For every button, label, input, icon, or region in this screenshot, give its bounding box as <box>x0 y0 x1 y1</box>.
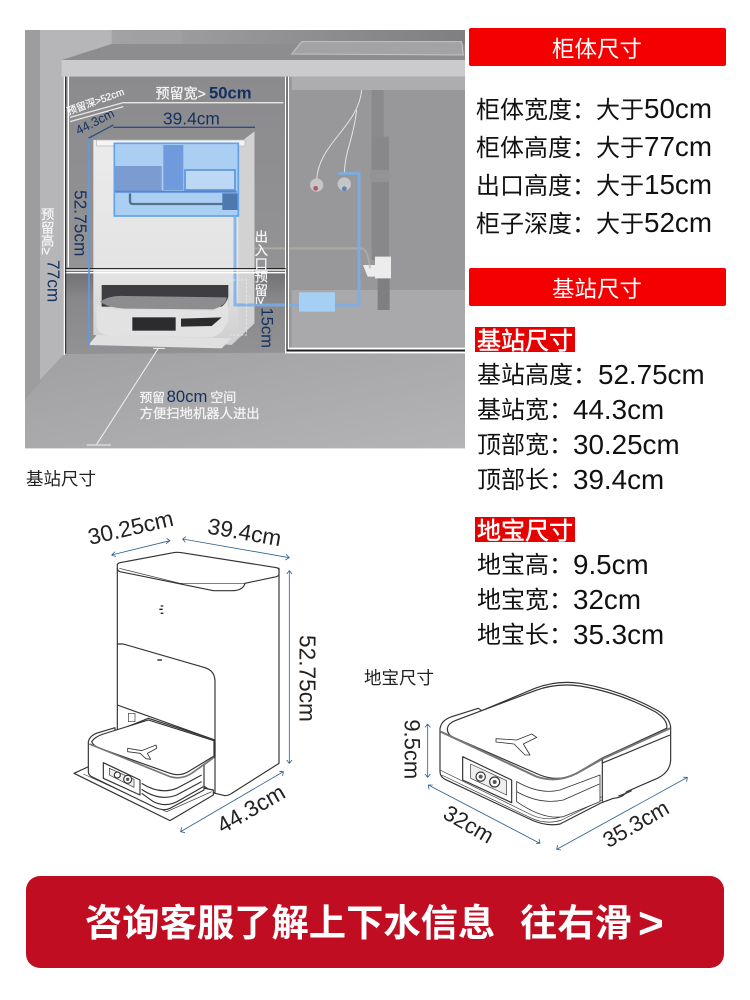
text block: cabinet size list: 柜子深度： <box>476 211 596 238</box>
back wall above counter <box>219 30 465 44</box>
dimension labels <box>85 505 320 838</box>
text block: base station dimensions: 顶部长： <box>477 467 573 494</box>
panel: under-sink cabinet installation photo <box>25 30 465 448</box>
text block: mop robot dimensions: 地宝长： <box>477 622 573 649</box>
lid <box>117 552 279 591</box>
robot control panel <box>103 763 140 795</box>
robot Y logo <box>128 745 157 759</box>
floor <box>25 353 465 448</box>
panel: under-sink cabinet installation photo: 50cm <box>209 83 252 102</box>
call to action banner: 往右滑 <box>520 902 632 944</box>
tubing behind <box>238 248 370 268</box>
call to action banner: 咨询客服了解上下水信息 <box>85 902 495 944</box>
dimension labels: 预留 <box>140 391 165 405</box>
dimension labels <box>399 719 673 853</box>
dimension labels: 44.3cm <box>212 779 290 838</box>
mop slots <box>517 775 600 817</box>
white P-trap <box>363 257 391 278</box>
drain pipe <box>372 90 384 137</box>
panel: under-sink cabinet installation photo: 77cm <box>44 260 64 302</box>
right cabinet interior <box>287 77 465 352</box>
panel: under-sink cabinet installation photo: 15cm <box>258 307 277 348</box>
tag: mop robot: 地宝尺寸 <box>477 518 573 545</box>
text block: base station dimensions: 52.75cm <box>598 359 705 390</box>
text block: cabinet size list: 柜体宽度： <box>476 97 596 124</box>
angle valves <box>310 178 323 192</box>
call to action banner: > <box>638 899 664 948</box>
caption: mop robot size: 地宝尺寸 <box>364 668 434 688</box>
dimension labels: 35.3cm <box>598 795 673 853</box>
text block: mop robot dimensions: 地宝高： <box>477 552 573 579</box>
text block: base station dimensions: 顶部宽： <box>477 432 573 459</box>
heading: cabinet size: 柜体尺寸 <box>552 37 642 62</box>
dimension labels: 出入口预留≥ <box>253 230 268 304</box>
control panel <box>463 757 512 803</box>
blue dimension arrows <box>425 724 687 850</box>
heading: base station size <box>469 268 726 306</box>
dimension labels: 32cm <box>439 800 498 849</box>
dimension labels <box>39 85 268 421</box>
text block: base station dimensions: 30.25cm <box>573 429 680 460</box>
left wall <box>25 30 40 400</box>
counter front edge <box>62 60 465 77</box>
front panel <box>117 644 215 740</box>
dimension labels: 39.4cm <box>206 513 283 551</box>
text block: cabinet size list: 大于77cm <box>596 131 712 162</box>
panel: under-sink cabinet installation photo: 80cm <box>167 387 207 406</box>
caption: base station size: 基站尺寸 <box>26 469 96 489</box>
dimension labels: 30.25cm <box>85 505 176 550</box>
heading: base station size: 基站尺寸 <box>552 277 642 302</box>
text block: mop robot dimensions: 35.3cm <box>573 619 664 650</box>
supply hoses <box>317 90 362 180</box>
text block: base station dimensions: 44.3cm <box>573 394 664 425</box>
dimension labels: 空间 <box>210 390 236 405</box>
blue water lines <box>235 173 359 305</box>
cabinet outline <box>64 77 465 355</box>
text block: base station dimensions <box>477 359 705 495</box>
Y logo <box>496 734 537 755</box>
robot mop slots <box>142 775 203 805</box>
dimension labels: 预留高≥ <box>39 207 54 255</box>
diagram: mop robot line drawing <box>399 682 687 853</box>
text block: cabinet size list: 大于50cm <box>596 93 712 124</box>
dimension lines <box>70 103 283 122</box>
text block: mop robot dimensions <box>477 549 664 650</box>
dimension labels: 52.75cm <box>294 635 320 722</box>
left cabinet interior <box>64 77 286 270</box>
blue dimension arrows <box>112 537 292 833</box>
robot dock plate <box>88 335 232 348</box>
robot body <box>97 296 228 337</box>
text block: mop robot dimensions: 32cm <box>573 584 641 615</box>
top plate <box>447 685 667 778</box>
dimension labels: 方便扫地机器人进出 <box>140 406 260 421</box>
text block: base station dimensions: 基站高度： <box>477 362 597 389</box>
text block: cabinet size list <box>476 93 712 238</box>
text block: cabinet size list: 出口高度： <box>476 173 596 200</box>
dimension labels: 预留宽> <box>156 85 206 101</box>
robot body <box>440 682 671 825</box>
dock plate <box>74 766 213 821</box>
water station body <box>93 132 254 345</box>
panel: under-sink cabinet installation photo: 44.3cm <box>73 106 117 138</box>
counter top surface <box>62 44 465 60</box>
station body <box>117 568 279 796</box>
call to action banner <box>26 876 724 968</box>
heading: cabinet size <box>469 28 726 66</box>
text block: cabinet size list: 大于52cm <box>596 207 712 238</box>
dimension labels: 预留深>52cm <box>65 85 126 118</box>
sink <box>292 42 463 55</box>
text block: base station dimensions: 39.4cm <box>573 464 664 495</box>
text block: mop robot dimensions: 9.5cm <box>573 549 649 580</box>
text block: cabinet size list: 柜体高度： <box>476 135 596 162</box>
robot slot <box>102 285 228 307</box>
text block: base station dimensions: 基站宽： <box>477 397 573 424</box>
logo mark <box>159 606 163 613</box>
panel: under-sink cabinet installation photo: 52.75cm <box>70 190 90 256</box>
diagram: base station line drawing <box>74 505 320 838</box>
blue tank overlay <box>114 143 238 216</box>
robot display <box>132 317 176 331</box>
dimension labels: 9.5cm <box>399 719 424 779</box>
robot <box>88 718 215 810</box>
text block: mop robot dimensions: 地宝宽： <box>477 587 573 614</box>
text block: cabinet size list: 大于15cm <box>596 169 712 200</box>
tag: base station: 基站尺寸 <box>477 328 573 355</box>
left plinth area <box>64 271 286 354</box>
panel: under-sink cabinet installation photo: 39.4cm <box>163 108 220 128</box>
dotted callout <box>225 280 247 335</box>
pump box <box>299 292 335 312</box>
